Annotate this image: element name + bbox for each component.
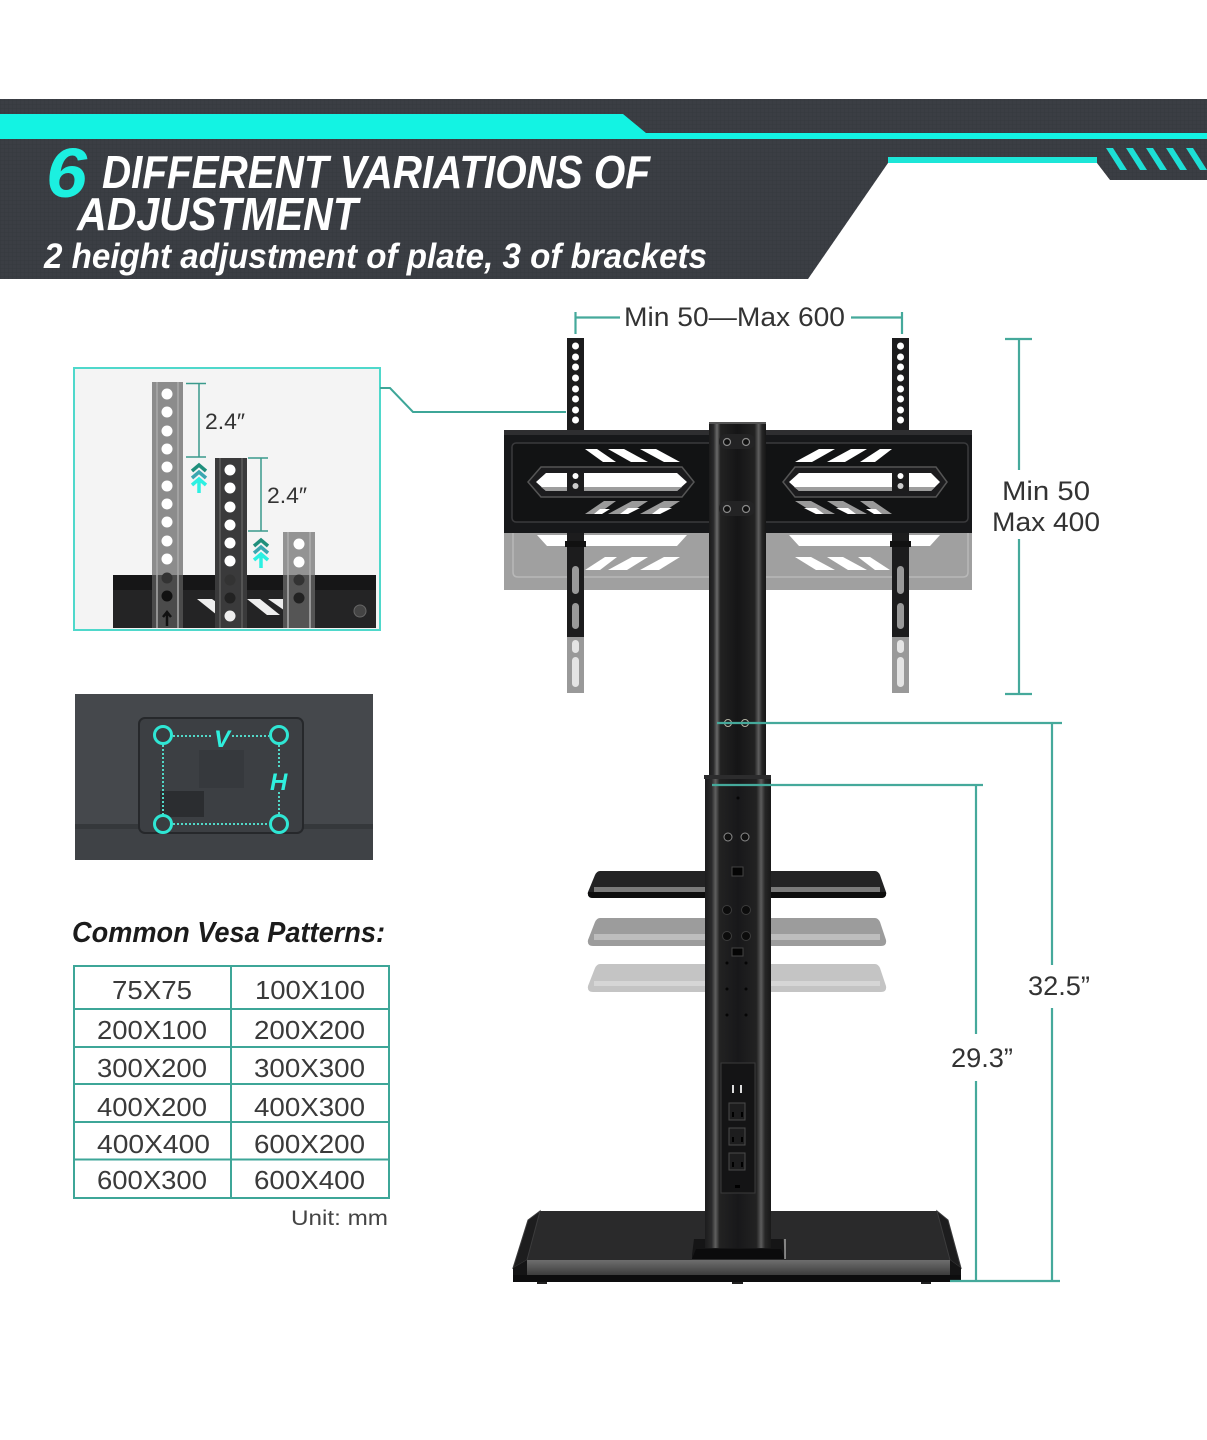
table values: 200X200: [254, 1015, 365, 1045]
banner dark background: [0, 99, 1207, 279]
upper column: [709, 422, 766, 775]
label: max 400: Max 400: [992, 507, 1100, 537]
column screws and holes: [722, 720, 750, 1016]
TV stand product illustration: [504, 338, 972, 1284]
dimension: upper 2.4 inch: [186, 384, 245, 457]
panel: TV back with VESA holes: [75, 694, 373, 860]
column foot collar: [692, 1239, 785, 1259]
table values: 100X100: [255, 975, 365, 1005]
left VESA bracket: [565, 338, 586, 693]
plate slots: upper row: [585, 449, 892, 462]
dimension: 29.3 inch height: [712, 785, 1013, 1281]
icon: upward arrow one: [192, 465, 206, 493]
table values: 400X300: [254, 1092, 365, 1122]
icon: upward arrow two: [254, 540, 268, 568]
tall gray strip: [152, 382, 183, 628]
middle dark strip: [215, 458, 247, 628]
mount recess: [139, 718, 303, 833]
callout connector line: [380, 388, 566, 412]
panel frame: [74, 368, 380, 630]
dimension: bracket width: Min 50—Max 600: [624, 302, 845, 332]
label: min 50: Min 50: [1002, 476, 1090, 506]
column collar: [704, 775, 771, 779]
dimension: 32.5 inch height: 32.5”: [1028, 971, 1090, 1001]
table values: 75X75: [112, 975, 192, 1005]
cyan lower line: [888, 157, 1097, 163]
cyan stripes: [1106, 148, 1207, 170]
lower column: [705, 775, 771, 1248]
dimension: bracket height: [992, 339, 1100, 694]
title line two: ADJUSTMENT: [76, 188, 361, 240]
dimension: 32.5 inch height: [717, 723, 1090, 1281]
plate cutout: right hexagon: [783, 467, 947, 497]
dimension: lower 2.4 inch: 2.4″: [267, 483, 307, 508]
VESA hole markers: [154, 726, 288, 832]
title number: 6: [46, 134, 88, 212]
V label: V: [214, 726, 232, 753]
plate cutout: left hexagon: [528, 467, 694, 497]
table values: 300X200: [97, 1053, 207, 1083]
dimension: lower 2.4 inch: [248, 458, 307, 531]
dimension: 29.3 inch height: 29.3”: [951, 1043, 1013, 1073]
table grid: [74, 966, 389, 1198]
table values: 400X400: [97, 1129, 210, 1159]
shelf: middle position ghost: [588, 918, 886, 946]
dimension: upper 2.4 inch: 2.4″: [205, 409, 245, 434]
table values: 600X400: [254, 1165, 365, 1195]
dimension: bracket width: [576, 302, 902, 334]
power outlet panel: [721, 1063, 755, 1193]
table values: 600X200: [254, 1129, 365, 1159]
shelf: top position: [588, 871, 886, 898]
title line one: DIFFERENT VARIATIONS OF: [102, 146, 652, 198]
heading: common VESA patterns: Common Vesa Patterns:: [72, 917, 385, 949]
table values: 600X300: [97, 1165, 207, 1195]
dotted VESA guides: [163, 736, 279, 824]
black plate: [113, 575, 376, 628]
header banner: [0, 99, 1207, 279]
TV back background: [75, 694, 373, 860]
table: VESA patterns: [74, 966, 389, 1198]
table values: 300X300: [254, 1053, 365, 1083]
subtitle: 2 height adjustment of plate, 3 of brackets: [43, 237, 707, 276]
H label: H: [270, 769, 288, 796]
table values: [97, 975, 365, 1195]
right VESA bracket: [890, 338, 911, 693]
unit note: Unit: mm: [291, 1207, 388, 1230]
cyan accent bar: [0, 114, 1207, 139]
gray lower plate ghost: [504, 533, 972, 590]
stand base: [513, 1211, 961, 1284]
shelf: lowest position ghost: [588, 964, 886, 992]
short gray strip: [283, 532, 315, 628]
panel: bracket height detail: [74, 368, 380, 630]
table values: 400X200: [97, 1092, 207, 1122]
bracket joint plate screws: [719, 434, 755, 516]
plate slots: lower row: [585, 501, 892, 514]
table values: 200X100: [97, 1015, 207, 1045]
black mounting plate: [504, 430, 972, 533]
